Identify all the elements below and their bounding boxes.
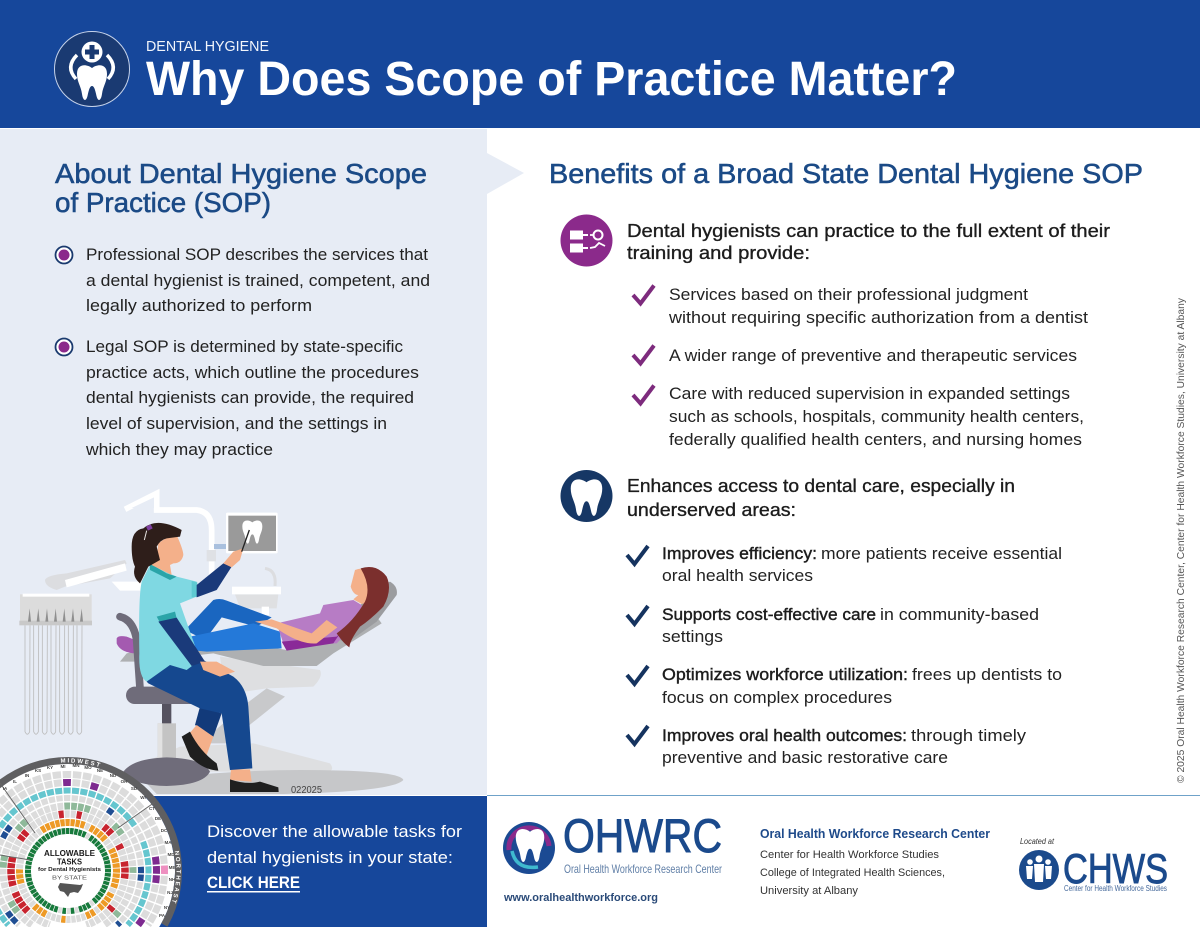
wheel state labels: KY	[47, 765, 53, 770]
bullet: professional SOP	[56, 245, 430, 315]
heading: about SOP	[55, 158, 427, 218]
list item: efficiency: oral health services	[662, 566, 813, 585]
wheel state labels: WI	[140, 795, 146, 800]
logo: CHWS: CHWS	[1063, 845, 1168, 892]
list item: efficiency: Improves efficiency:	[662, 544, 817, 563]
call to action: CLICK HERE	[207, 873, 300, 892]
panel: about SOP	[0, 129, 524, 796]
bullet: legal SOP: which they may practice	[85, 440, 273, 459]
list item: cost-effective: settings	[662, 627, 723, 646]
footer	[0, 757, 1200, 927]
icon: dental tools	[560, 214, 612, 266]
wheel state labels: SD	[131, 786, 138, 791]
wheel state labels: NH	[169, 877, 175, 882]
heading: about SOP: About Dental Hygiene Scope	[55, 158, 427, 189]
logo: OHWRC: Oral Health Workforce Research Center	[564, 862, 722, 876]
subheading: access: underserved areas:	[627, 499, 796, 520]
subheading: access: Enhances access to dental care, especially in	[627, 475, 1015, 496]
title: Why Does Scope of Practice Matter?	[146, 53, 957, 106]
heading: about SOP: of Practice (SOP)	[55, 187, 271, 218]
wheel region names: MIDWEST	[60, 758, 100, 767]
list item: wider range: A wider range of preventive and therapeutic services	[669, 346, 1077, 365]
logo: OHWRC	[503, 809, 722, 876]
wheel state labels: IA	[3, 786, 8, 791]
wheel centre label: BY STATE	[52, 876, 87, 882]
wheel state labels: ND	[110, 773, 117, 778]
wheel grey cells	[0, 775, 165, 925]
list item: reduced supervision: federally qualified health centers, and nursing homes	[669, 430, 1082, 449]
bullet: legal SOP: practice acts, which outline the procedures	[86, 363, 419, 382]
wheel centre label	[38, 850, 101, 897]
wheel chart: allowable tasks by state	[0, 757, 182, 927]
list item: reduced supervision: Care with reduced supervision in expanded settings	[669, 384, 1070, 403]
wheel state labels: OH	[121, 779, 127, 784]
wheel centre label: TASKS	[57, 858, 83, 866]
logo: CHWS: Located at	[1020, 837, 1055, 846]
list item: workforce	[627, 665, 1062, 707]
bullet: legal SOP	[56, 337, 419, 459]
wheel state labels: MD	[168, 852, 175, 857]
copyright note: © 2025 Oral Health Workforce Research Center, Center for Health Workforce Studies, University at Albany	[1175, 297, 1187, 783]
list item: efficiency	[627, 544, 1062, 585]
call to action: dental hygienists in your state:	[207, 848, 453, 867]
list item: reduced supervision	[633, 384, 1084, 449]
bullet: legal SOP: dental hygienists can provide, the required	[86, 388, 414, 407]
wheel state labels	[3, 763, 175, 918]
wheel coloured cells	[0, 775, 165, 925]
list item: outcomes	[627, 726, 1027, 767]
list item: cost-effective: Supports cost-effective care	[662, 605, 876, 624]
list item: professional judgment: without requiring specific authorization from a dentist	[668, 308, 1088, 327]
list item: efficiency: more patients receive essential	[821, 544, 1062, 563]
wheel state labels: PA	[159, 913, 166, 918]
wheel state labels: MI	[60, 764, 66, 769]
wheel state labels: IL	[13, 779, 17, 784]
list item: outcomes: Improves oral health outcomes:	[662, 726, 907, 745]
address block: College of Integrated Health Sciences,	[760, 867, 945, 879]
bullet: legal SOP: level of supervision, and the settings in	[86, 414, 387, 433]
subheading: access	[627, 475, 1015, 520]
header banner	[0, 0, 1200, 128]
subheading: full extent: training and provide:	[627, 242, 810, 263]
icon: tooth	[560, 470, 612, 522]
panel: benefits	[549, 158, 1143, 767]
wheel centre label: ALLOWABLE	[44, 849, 96, 858]
subheading: full extent: Dental hygienists can practice to the full extent of their	[627, 220, 1110, 241]
address block: Center for Health Workforce Studies	[760, 849, 940, 861]
wheel state labels: KS	[35, 768, 41, 773]
wheel state labels: MO	[84, 765, 92, 770]
list item: cost-effective: in community-based	[880, 605, 1039, 624]
list item: workforce: focus on complex procedures	[662, 688, 892, 707]
bullet: professional SOP: legally authorized to perform	[86, 296, 312, 315]
heading: benefits: Benefits of a Broad State Dental Hygiene SOP	[549, 158, 1143, 189]
call to action	[0, 796, 487, 927]
website: www.oralhealthworkforce.org	[503, 892, 658, 904]
eyebrow label: DENTAL HYGIENE	[146, 38, 269, 55]
wheel state labels: ME	[169, 865, 175, 870]
wheel state labels: DC	[161, 828, 168, 833]
wheel state labels: MN	[72, 763, 80, 768]
logo: CHWS: Center for Health Workforce Studies	[1064, 884, 1167, 893]
wheel state labels: MA	[164, 840, 172, 845]
bullet: legal SOP: Legal SOP is determined by state-specific	[86, 337, 403, 356]
list item: professional judgment: Services based on their professional judgment	[669, 285, 1028, 304]
list item: professional judgment	[633, 285, 1088, 327]
call to action: Discover the allowable tasks for	[207, 822, 462, 841]
date code: 022025	[291, 785, 322, 796]
subheading: full extent	[627, 220, 1110, 263]
list item: reduced supervision: such as schools, hospitals, community health centers,	[669, 407, 1084, 426]
bullet: professional SOP: Professional SOP describes the services that	[86, 245, 428, 264]
wheel state labels: NJ	[167, 890, 173, 895]
icon: tooth with plus badge	[54, 32, 130, 106]
wheel centre label: for Dental Hygienists	[38, 867, 101, 873]
list item: cost-effective	[627, 605, 1039, 646]
wheel state labels: CT	[149, 806, 155, 811]
list item: outcomes: preventive and basic restorative care	[662, 748, 948, 767]
list item: workforce: Optimizes workforce utilization:	[662, 665, 908, 684]
wheel region names	[60, 758, 181, 904]
wheel state labels: NY	[164, 905, 170, 910]
wheel state labels: IN	[25, 773, 29, 778]
address block	[760, 827, 990, 897]
wheel state labels: DE	[155, 816, 161, 821]
list item: workforce: frees up dentists to	[912, 665, 1062, 684]
illustration: hygienist and patient in dental chair	[19, 493, 403, 794]
wheel region names: NORTHEAST	[172, 850, 181, 904]
address block: University at Albany	[760, 885, 858, 897]
address block: Oral Health Workforce Research Center	[760, 827, 990, 841]
list item: outcomes: through timely	[911, 726, 1027, 745]
logo: CHWS	[1019, 837, 1168, 893]
bullet: professional SOP: a dental hygienist is trained, competent, and	[86, 271, 430, 290]
logo: OHWRC: OHWRC	[563, 809, 722, 862]
wheel state labels: NE	[97, 768, 103, 773]
